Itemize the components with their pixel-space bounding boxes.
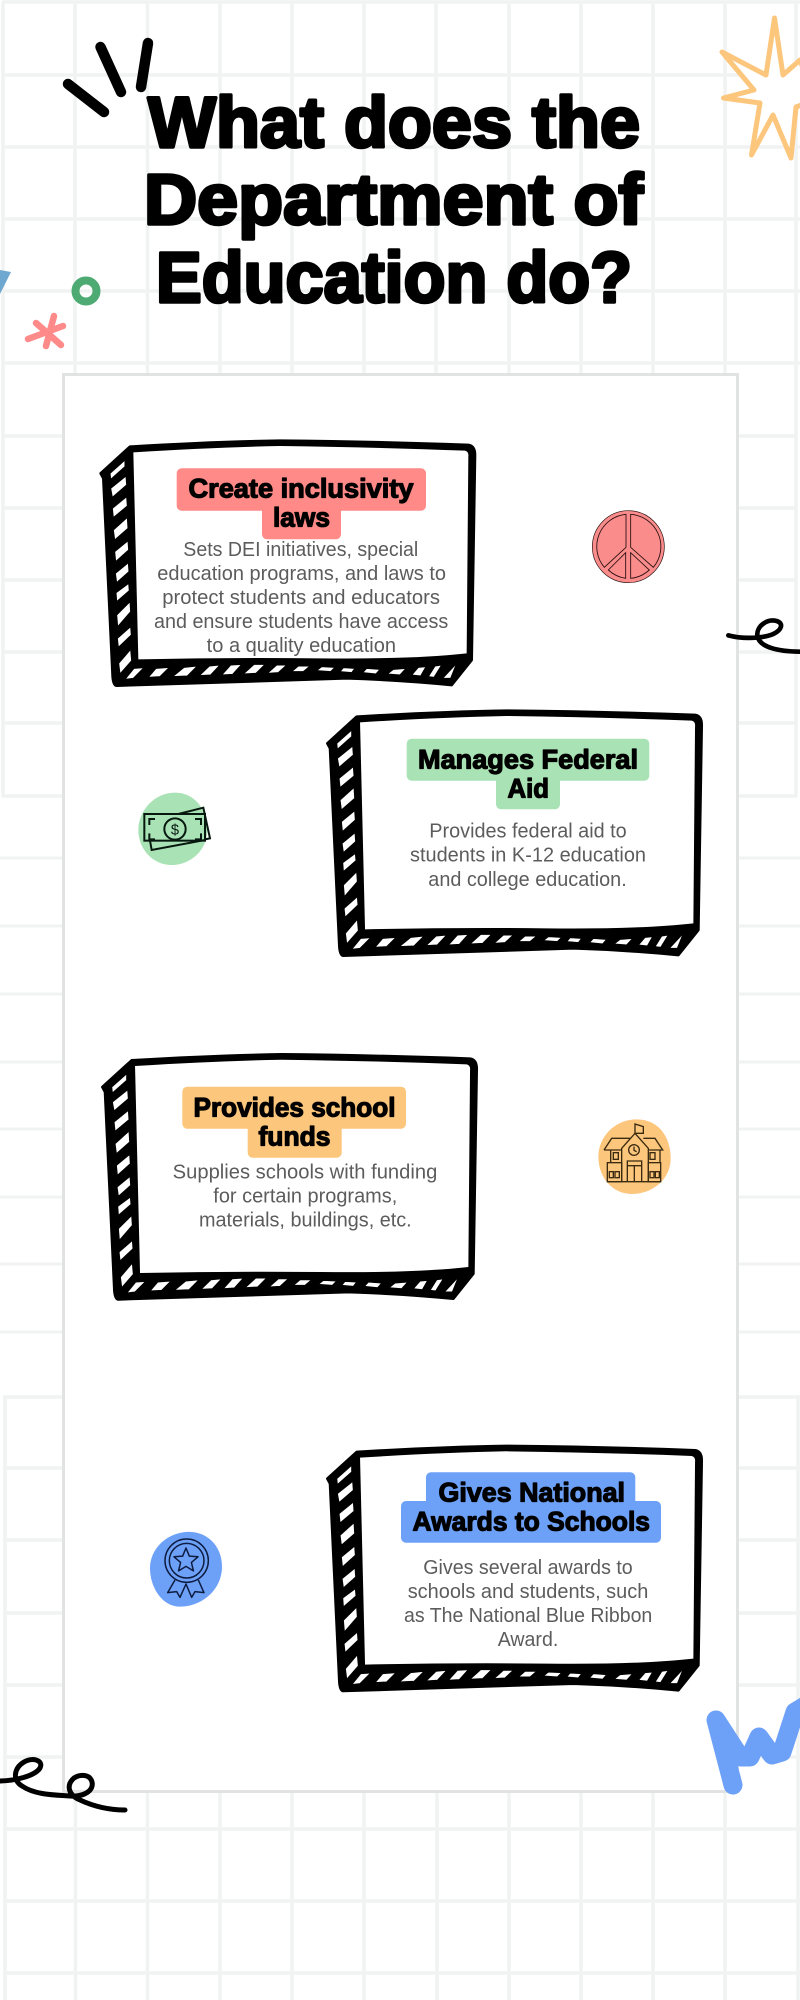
title xyxy=(144,84,643,318)
card 3 heading xyxy=(194,1093,396,1151)
card 2 heading xyxy=(418,744,638,803)
decoration: black curl at right xyxy=(728,620,800,652)
card 1 heading xyxy=(188,473,414,533)
card 4 heading: Awards to Schools xyxy=(412,1507,650,1537)
card 1 body text xyxy=(154,539,448,657)
icon: money bills xyxy=(138,793,210,865)
decoration: green ring xyxy=(76,280,96,302)
card 2 body text: students in K-12 education xyxy=(410,845,646,867)
card 1 frame xyxy=(101,441,475,686)
card 3 body text: Supplies schools with funding xyxy=(173,1162,437,1184)
card 4 heading: Gives National xyxy=(438,1478,625,1508)
card 3 heading: Provides school xyxy=(194,1093,396,1123)
decoration: black curl at bottom left xyxy=(0,1760,125,1810)
title: Education do? xyxy=(156,239,632,318)
card 3 frame xyxy=(102,1054,477,1299)
card 2 body text: and college education. xyxy=(428,869,627,891)
card 3 heading highlight xyxy=(182,1087,406,1158)
card 2 heading: Aid xyxy=(508,773,549,803)
card 4 body text: as The National Blue Ribbon xyxy=(404,1605,652,1627)
card 3: Provides school funds xyxy=(102,1054,477,1299)
decoration: black spark lines xyxy=(68,43,148,112)
title: What does the xyxy=(148,84,640,163)
card 4 body text: Award. xyxy=(498,1629,558,1651)
card 1 body text: education programs, and laws to xyxy=(157,563,446,585)
icon: money bills: $ xyxy=(171,822,179,838)
card 4: Gives National Awards to Schools xyxy=(327,1446,702,1691)
card 2 body text: Provides federal aid to xyxy=(429,821,627,843)
card 4 body text: Gives several awards to xyxy=(423,1557,633,1579)
card 1: Create inclusivity laws xyxy=(101,441,475,686)
card 2 body text xyxy=(410,821,646,891)
decoration: blue shape at left edge xyxy=(0,270,11,294)
card 1 heading: laws xyxy=(273,503,330,533)
card 1 body text: protect students and educators xyxy=(162,587,440,609)
white content panel xyxy=(64,374,738,1792)
card 2 heading highlight xyxy=(407,739,649,809)
title: Department of xyxy=(144,161,643,240)
decoration: pink asterisk xyxy=(28,316,63,346)
card 1 body text: Sets DEI initiatives, special xyxy=(183,539,418,561)
card 4 frame xyxy=(327,1446,702,1691)
card 3 body text: for certain programs, xyxy=(213,1186,397,1208)
card 3 heading: funds xyxy=(258,1121,330,1151)
icon: peace sign xyxy=(592,511,664,583)
card 4 body text xyxy=(404,1557,652,1651)
card 1 heading: Create inclusivity xyxy=(188,473,414,503)
card 1 body text: to a quality education xyxy=(207,635,396,657)
card 4 heading xyxy=(412,1478,650,1537)
icon: award ribbon xyxy=(150,1532,222,1607)
icon: school building xyxy=(598,1119,671,1194)
card 2 heading: Manages Federal xyxy=(418,744,638,774)
card 2 frame xyxy=(327,711,702,956)
decoration: orange star outline xyxy=(722,18,800,158)
card 3 body text: materials, buildings, etc. xyxy=(199,1210,412,1232)
card 2: Manages Federal Aid xyxy=(327,711,702,956)
card 1 heading highlight xyxy=(177,468,426,539)
decoration: blue scribble at bottom right xyxy=(716,1700,800,1785)
card 3 body text xyxy=(173,1162,437,1232)
card 1 body text: and ensure students have access xyxy=(154,611,448,633)
card 4 body text: schools and students, such xyxy=(408,1581,648,1603)
card 4 heading highlight xyxy=(401,1472,661,1543)
